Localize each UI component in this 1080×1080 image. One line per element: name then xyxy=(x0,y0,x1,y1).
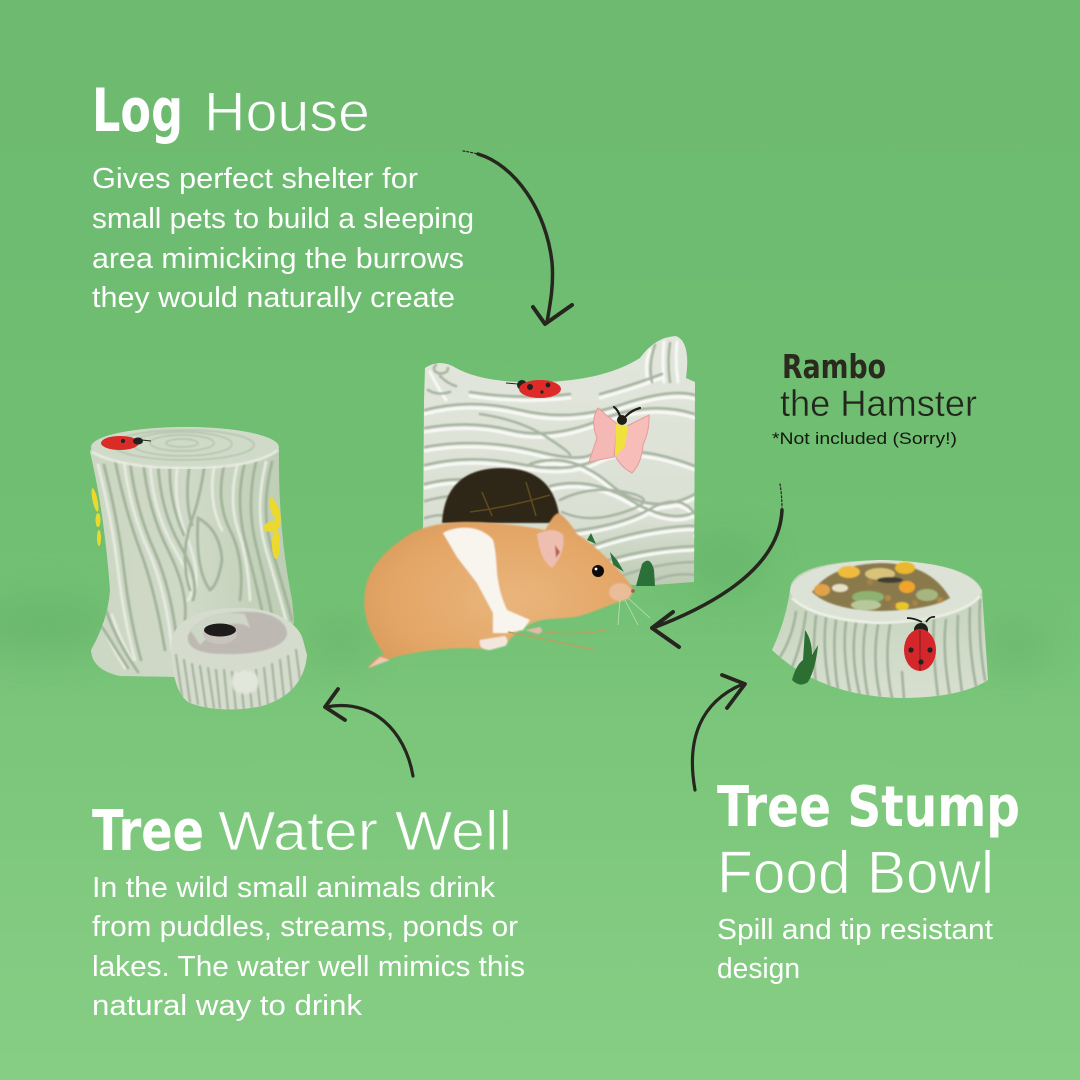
heading: Tree Stump Food Bowl xyxy=(717,775,1020,906)
ladybird on log xyxy=(506,380,561,398)
white band xyxy=(443,528,530,633)
arrow: to food bowl xyxy=(692,675,745,790)
heading: Log House xyxy=(92,76,370,146)
stump body xyxy=(90,427,294,677)
straw xyxy=(508,630,605,650)
muzzle xyxy=(609,583,631,601)
text: log house description: area mimicking the burrows xyxy=(92,243,464,275)
stump top xyxy=(91,427,279,467)
text: log house description: Gives perfect shelter for xyxy=(92,163,418,195)
text: food bowl description: design xyxy=(717,953,800,985)
text: food bowl description: Spill and tip resistant xyxy=(717,914,993,946)
label: Rambo the Hamster: Rambo xyxy=(782,347,886,386)
illustration: hamster xyxy=(364,513,650,668)
heading: Tree Water Well: Tree xyxy=(92,799,204,864)
text: food bowl description xyxy=(717,914,993,985)
label: Rambo the Hamster: *Not included (Sorry!) xyxy=(772,429,957,448)
text: log house description: they would naturally create xyxy=(92,282,455,314)
text: water well description: In the wild small animals drink xyxy=(92,872,496,904)
illustration: food bowl xyxy=(772,560,988,698)
small water bowl xyxy=(171,608,307,710)
ladybird on stump xyxy=(101,436,151,450)
eye xyxy=(592,565,604,577)
text: log house description: small pets to build a sleeping xyxy=(92,203,474,235)
label: Rambo the Hamster: the Hamster xyxy=(780,383,977,424)
ladybird on bowl xyxy=(904,617,936,671)
heading: Log House: Log xyxy=(92,76,183,146)
heading: Tree Water Well: Water Well xyxy=(218,799,512,862)
floor shadows xyxy=(0,535,1045,669)
ear xyxy=(537,530,564,568)
heading: Log House: House xyxy=(204,80,370,143)
whiskers xyxy=(618,598,650,625)
text: log house description xyxy=(92,163,474,314)
illustration: log house xyxy=(423,336,699,586)
text: water well description: from puddles, streams, ponds or xyxy=(92,911,518,943)
butterfly on log xyxy=(589,407,649,473)
paws xyxy=(480,636,508,650)
yellow flower xyxy=(90,488,283,559)
log hole xyxy=(442,468,560,523)
label: Rambo the Hamster xyxy=(772,347,977,448)
arrow: to log house xyxy=(463,151,572,324)
heading: Tree Water Well xyxy=(92,799,512,864)
grass on log xyxy=(587,533,655,586)
arrow: to water well xyxy=(325,689,413,776)
illustration: tree water well xyxy=(90,427,307,710)
arrow: to hamster xyxy=(652,484,782,647)
text: water well description: lakes. The water well mimics this xyxy=(92,951,525,983)
text: water well description: natural way to drink xyxy=(92,990,363,1022)
text: water well description xyxy=(92,872,525,1022)
heading: Tree Stump Food Bowl: Tree Stump xyxy=(717,775,1020,840)
heading: Tree Stump Food Bowl: Food Bowl xyxy=(717,839,994,906)
grass on bowl xyxy=(792,630,818,685)
seed mix xyxy=(812,562,950,611)
